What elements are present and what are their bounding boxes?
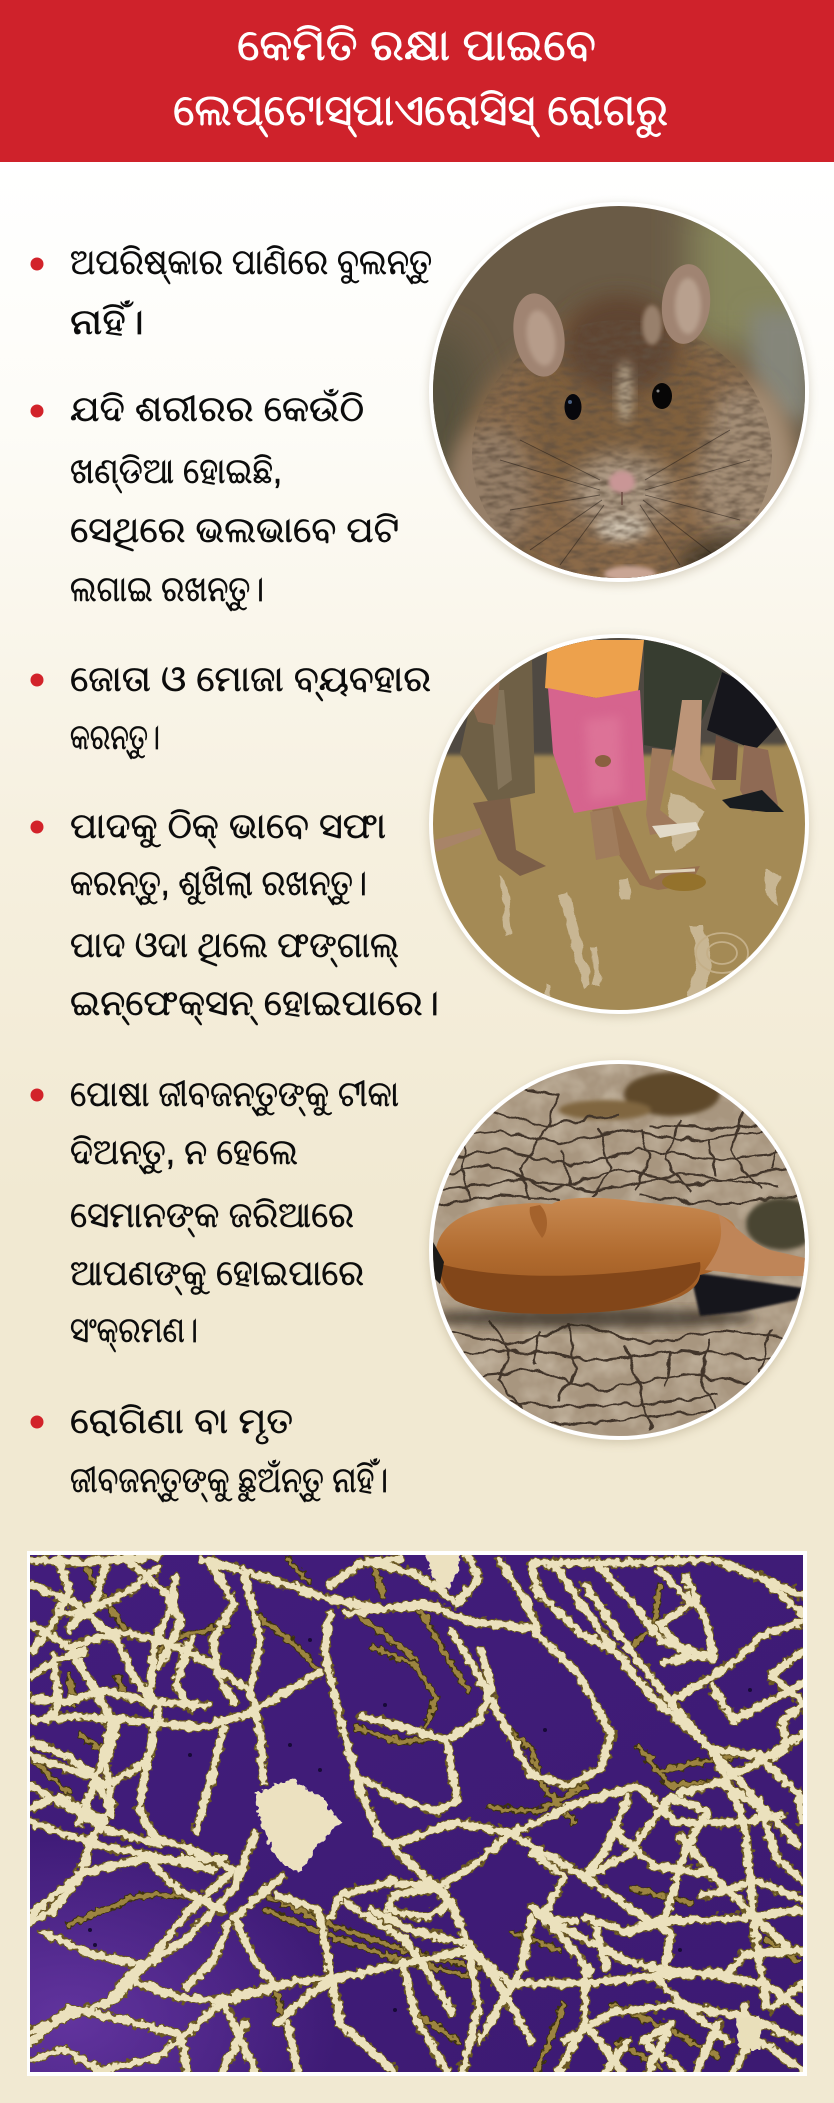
title text: ଲେପ୍ଟୋସ୍ପାଏରୋସିସ୍ ରୋଗରୁ: [173, 86, 668, 137]
rat fur texture: [472, 321, 772, 578]
bullet: dirty water: ନାହିଁ।: [70, 299, 144, 342]
bullet: vaccinate pets: ଦିଅନ୍ତୁ, ନ ହେଲେ: [70, 1131, 298, 1175]
person right: camo shorts and legs: [644, 640, 722, 838]
photo: leptospira bacteria micrograph: [27, 1551, 807, 2076]
dark backdrop: [446, 638, 788, 758]
bullet: avoid sick or dead animals: [30, 1400, 388, 1503]
cracked mud lines: [430, 1085, 808, 1430]
bullet: dirty water: [30, 241, 432, 342]
bullet: cover wounds: ଖଣ୍ଡିଆ ହୋଇଛି,: [70, 450, 282, 493]
bullet: vaccinate pets: ସଂକ୍ରମଣ।: [70, 1309, 198, 1352]
person far right: black shorts and sandals: [707, 672, 784, 812]
spirochete strands: [32, 1552, 803, 2071]
bullet: clean dry feet: ପାଦ ଓଦା ଥିଲେ ଫଙ୍ଗାଲ୍: [70, 924, 399, 967]
rat body: [444, 344, 800, 578]
water ripple: [696, 933, 748, 973]
bush: [746, 1198, 818, 1250]
bacteria clump: top: [426, 1555, 460, 1590]
water reflections: [500, 790, 780, 1010]
bullet: avoid sick or dead animals: ରୋଗିଣା ବା ମୃତ: [70, 1400, 293, 1444]
bacteria clump: centre: [255, 1779, 340, 1874]
bullet: avoid sick or dead animals: ଜୀବଜନ୍ତୁଙ୍କୁ ଛୁଅଁନ୍ତୁ ନାହିଁ।: [70, 1457, 388, 1503]
title text: କେମିତି ରକ୍ଷା ପାଇବେ: [237, 21, 596, 70]
bullet: cover wounds: ସେଥିରେ ଭଲଭାବେ ପଟି: [70, 509, 399, 551]
bullet: cover wounds: ଲଗାଇ ରଖନ୍ତୁ।: [70, 568, 264, 612]
rat eyes and nose: [564, 383, 672, 505]
bullet: cover wounds: ଯଦି ଶରୀରର କେଉଁଠି: [70, 388, 364, 429]
bullet: clean dry feet: [30, 805, 439, 1025]
bullet: vaccinate pets: [30, 1073, 399, 1352]
bullet: shoes and socks: [30, 658, 431, 760]
photo circle: rat: [424, 200, 814, 589]
header banner: [0, 0, 834, 162]
rat whiskers: [500, 430, 750, 565]
rat paw: [604, 566, 656, 582]
dry grass: [559, 1072, 720, 1120]
bullet: cover wounds: [30, 388, 399, 612]
bullet: vaccinate pets: ପୋଷା ଜୀବଜନ୍ତୁଙ୍କୁ ଟୀକା: [70, 1073, 399, 1117]
photo circle: dead animal on cracked earth: [425, 1060, 818, 1443]
title text: [173, 21, 668, 137]
bullet: vaccinate pets: ସେମାନଙ୍କ ଜରିଆରେ: [70, 1194, 354, 1237]
rat ears: [507, 262, 714, 381]
bullet: clean dry feet: ପାଦକୁ ଠିକ୍ ଭାବେ ସଫା: [70, 805, 386, 849]
rat head: [525, 295, 709, 541]
photo circle: flood water feet: [429, 634, 809, 1017]
bullet: shoes and socks: ଜୋତା ଓ ମୋଜା ବ୍ୟବହାର: [70, 658, 431, 701]
person centre: pink skirt and orange top: [545, 640, 706, 891]
bullet: clean dry feet: ଇନ୍‌ଫେକ୍‌ସନ୍ ହୋଇପାରେ।: [70, 982, 439, 1025]
bullet: clean dry feet: କରନ୍ତୁ, ଶୁଖିଲା ରଖନ୍ତୁ।: [70, 862, 367, 906]
animal body: [435, 1198, 740, 1314]
animal tail: [690, 1272, 803, 1316]
person left: muddy shorts and leg: [434, 660, 546, 876]
purple membrane pores: [88, 1638, 752, 2012]
bullet: dirty water: ଅପରିଷ୍କାର ପାଣିରେ ବୁଲନ୍ତୁ: [70, 241, 432, 285]
bullet: shoes and socks: କରନ୍ତୁ।: [70, 716, 160, 760]
ground mottling: [429, 1060, 809, 1440]
bullet list: [30, 241, 439, 1503]
animal shadow: [425, 1308, 755, 1328]
bacteria clump: lower right: [734, 2016, 761, 2049]
bullet: vaccinate pets: ଆପଣଙ୍କୁ ହୋଇପାରେ: [70, 1252, 364, 1296]
